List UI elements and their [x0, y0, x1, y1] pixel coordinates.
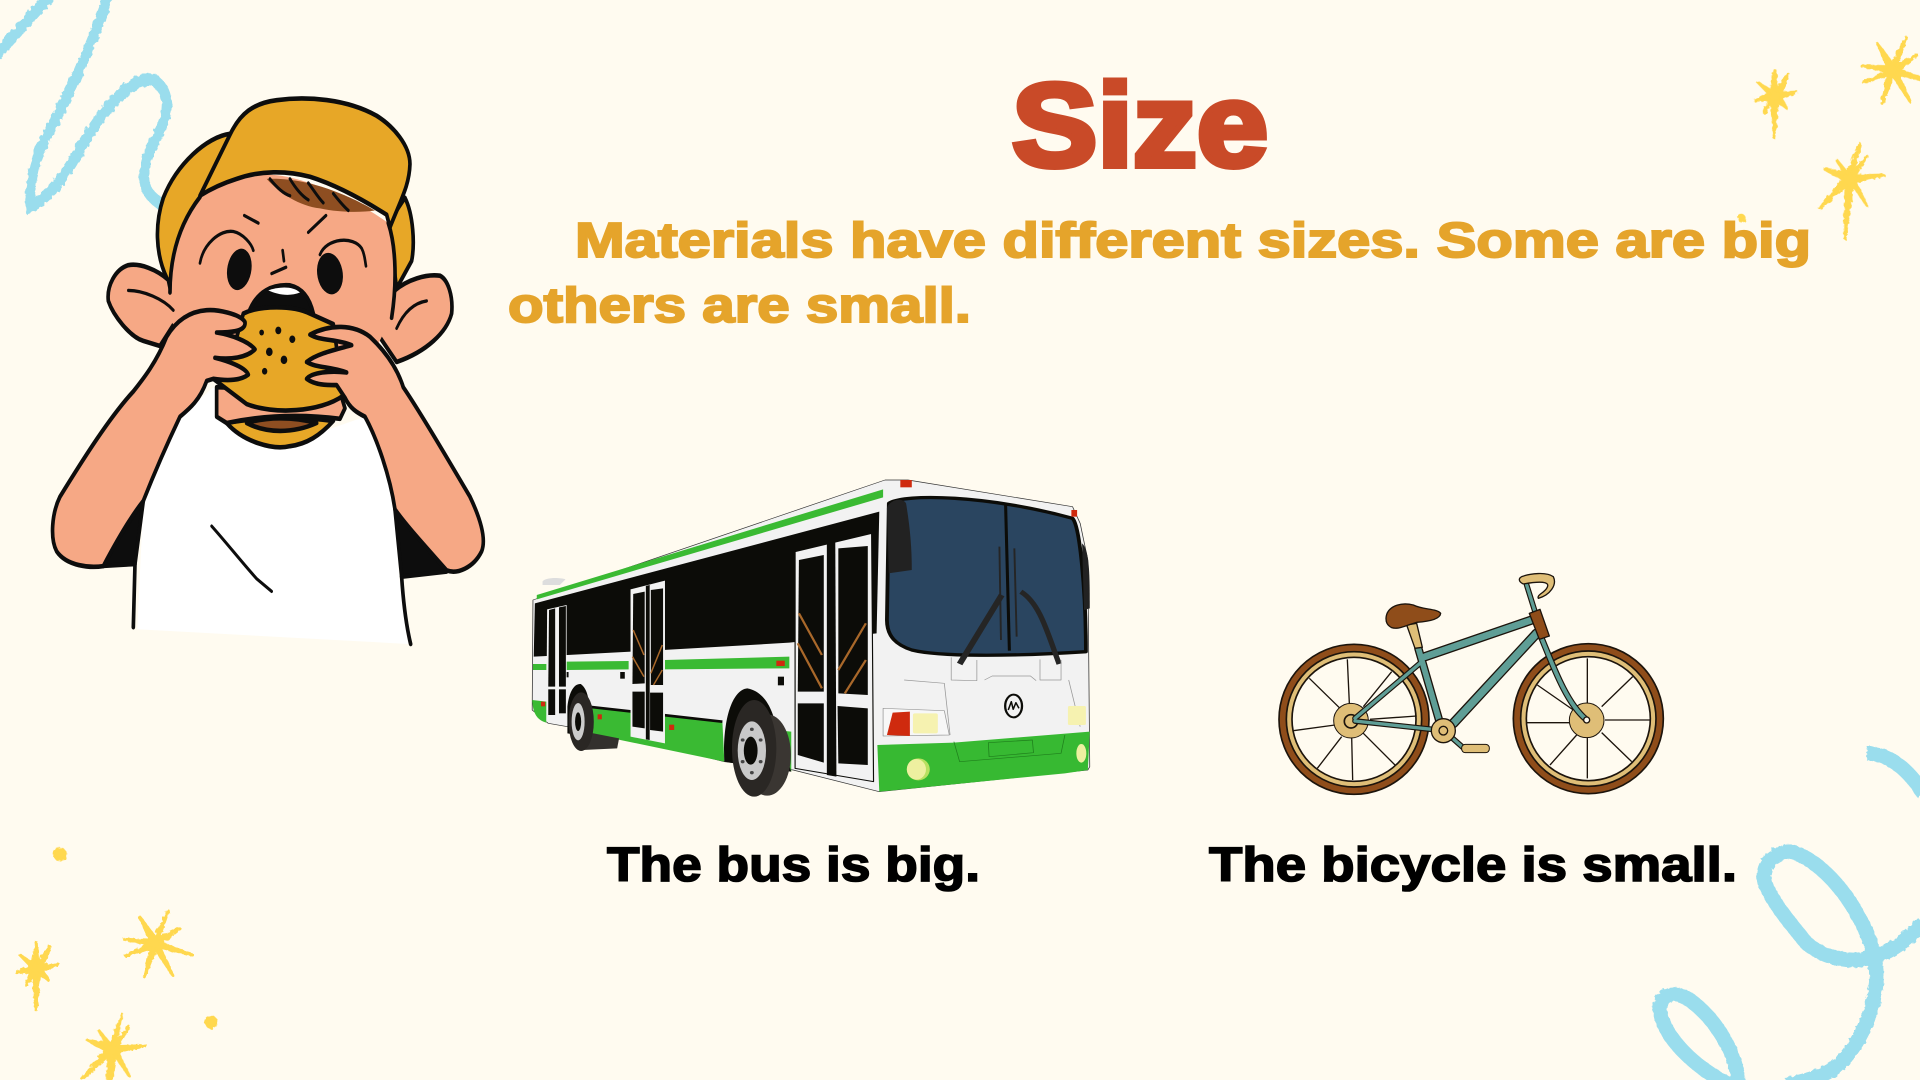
bicycle: rear wheel: [1279, 644, 1429, 794]
bus: front details: [904, 657, 1080, 735]
bus: fog lamps: [907, 744, 1086, 780]
bus: roof stripe and vent: [537, 489, 883, 599]
boy: shirt lines: [133, 526, 411, 644]
bus: front grille lines: [954, 735, 1065, 762]
illustration: bus: [532, 480, 1090, 797]
bus: front door: [795, 533, 874, 782]
bus: logo: [1005, 695, 1022, 717]
boy: hair: [267, 179, 375, 212]
dot: upper: [55, 849, 65, 860]
boy: eyes and brows: [200, 216, 366, 298]
bus: side stripes: [533, 657, 789, 670]
bus: lower green front: [877, 732, 1090, 792]
bicycle: frame tubes: [1355, 585, 1586, 748]
boy: mouth: [248, 285, 313, 314]
bicycle: chainring: [1431, 719, 1455, 743]
bicycle: head tube: [1529, 609, 1549, 639]
bus: wipers: [960, 547, 1059, 664]
bus: body: [532, 480, 1090, 792]
bus: mirrors: [887, 500, 1090, 610]
boy: right arm and hand: [307, 327, 483, 572]
intro text: line 1: Materials have different sizes. Some are big: [575, 214, 1811, 268]
bus: middle door: [631, 581, 665, 743]
bus: front wheel: [724, 688, 791, 797]
bicycle: frame outline: [1355, 585, 1586, 748]
stars: top-right yellow: [1739, 37, 1920, 238]
star: upper right: [124, 911, 193, 977]
illustration: bicycle: [1279, 574, 1663, 794]
star: far top-right: [1862, 37, 1920, 103]
title: Size: [1012, 60, 1268, 192]
bus: rear door: [546, 605, 567, 725]
stars: bottom-left yellow: [17, 849, 216, 1080]
boy: face: [168, 175, 395, 379]
boy: left arm and hand: [53, 310, 255, 567]
dot: near heading text: [1739, 216, 1744, 221]
bicycle: pedal: [1462, 744, 1489, 753]
star: right large: [1820, 144, 1883, 238]
scribble: bottom-right blue: [1660, 753, 1920, 1080]
star: left: [17, 943, 58, 1010]
boy: ears: [108, 265, 452, 362]
intro text: line 2: others are small.: [508, 279, 971, 333]
bus: windshield: [887, 498, 1086, 655]
bicycle: handlebar: [1519, 574, 1554, 598]
bus: side windows: [534, 512, 879, 657]
boy: cap: [200, 98, 410, 227]
bus: lower green skirt: [532, 700, 791, 772]
boy: sleeves: [100, 501, 447, 577]
boy: hat side panels: [157, 134, 413, 295]
bus: headlights: [883, 706, 1086, 736]
bicycle: seat post: [1407, 623, 1422, 648]
boy: chin and lower bun: [217, 387, 345, 447]
intro text: [508, 214, 1811, 333]
bicycle: saddle: [1386, 604, 1441, 628]
bicycle: front wheel: [1513, 644, 1663, 794]
bus: side markers: [541, 661, 785, 758]
boy: t-shirt: [137, 387, 408, 644]
illustration: boy eating a burger: [53, 98, 483, 644]
bicycle caption: The bicycle is small.: [1209, 839, 1737, 892]
scribble: top-left blue: [0, 0, 168, 208]
star: top-right small: [1755, 70, 1797, 138]
dot: lower: [206, 1017, 216, 1027]
star: bottom: [82, 1015, 146, 1080]
bus: roof markers: [900, 480, 1077, 517]
bicycle: hub axle: [1584, 717, 1590, 723]
boy: burger bun with seeds: [213, 307, 343, 410]
bus: rear wheel: [567, 684, 619, 751]
boy: ear creases: [128, 290, 427, 328]
bus caption: The bus is big.: [607, 839, 980, 892]
